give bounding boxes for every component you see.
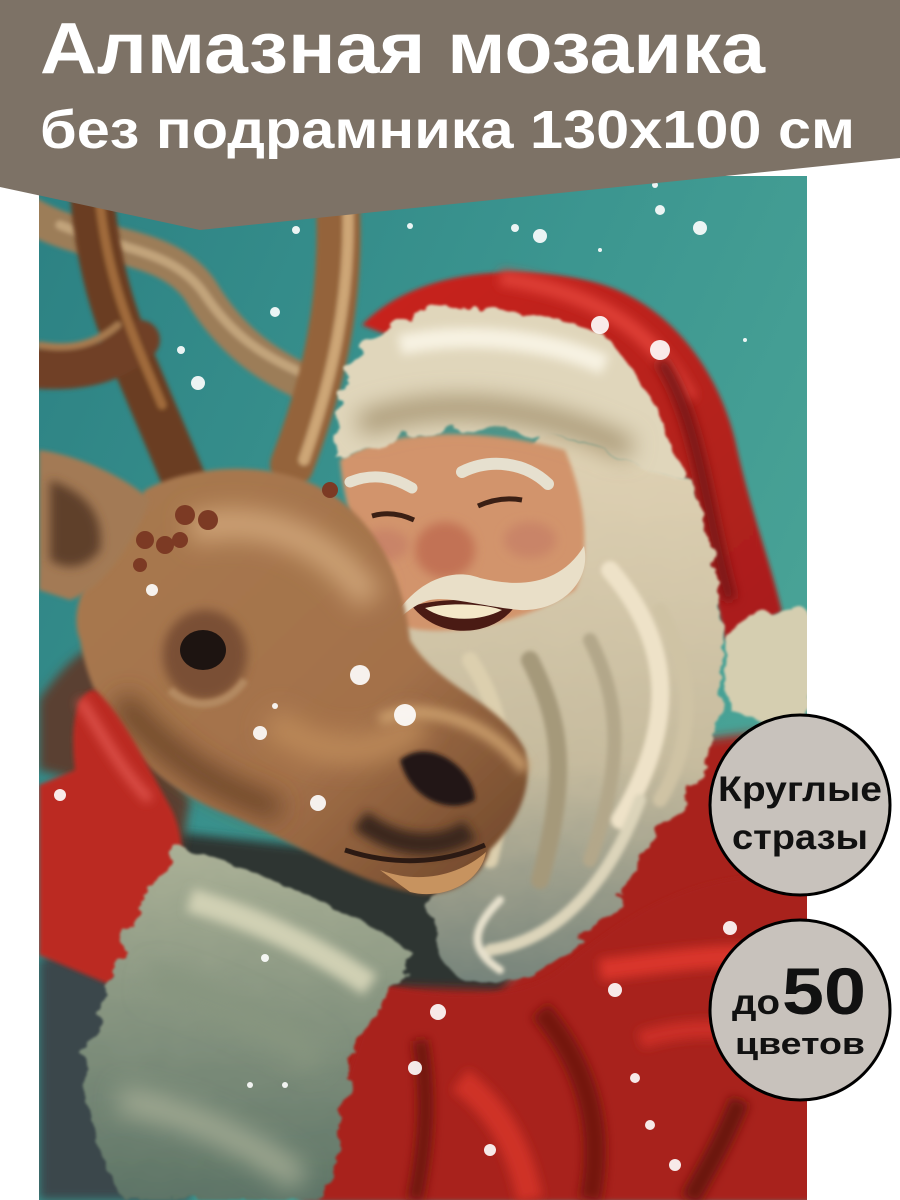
badge: round rhinestones: Круглые bbox=[718, 770, 882, 809]
deer mouth bbox=[360, 820, 470, 844]
dark lower-left background bbox=[39, 956, 194, 1200]
badge: up to 50 colours: цветов bbox=[735, 1026, 865, 1061]
antler base berries bbox=[133, 482, 338, 572]
back antler bbox=[30, 215, 310, 385]
title: Алмазная мозаика bbox=[40, 9, 766, 89]
deer fur highlight bbox=[190, 524, 370, 600]
subtitle: без подрамника 130х100 см bbox=[40, 100, 855, 160]
deer nose bbox=[400, 751, 475, 806]
header banner bbox=[0, 0, 900, 230]
red mitten bbox=[39, 690, 182, 985]
mouth bbox=[412, 600, 515, 631]
deer ear bbox=[39, 450, 150, 600]
right antler bbox=[292, 205, 348, 465]
shoulder fur bbox=[725, 610, 815, 735]
eyebrows bbox=[350, 477, 412, 488]
beard strands bbox=[470, 570, 686, 970]
red sleeve bbox=[320, 940, 807, 1200]
badge: up to 50 colours: до bbox=[732, 983, 780, 1022]
hat fur brim bbox=[337, 309, 684, 480]
Santa face bbox=[340, 434, 585, 631]
eyes bbox=[372, 514, 414, 520]
badge: round rhinestones bbox=[710, 715, 890, 895]
badge: round rhinestones: стразы bbox=[732, 818, 868, 857]
badge: up to 50 colours bbox=[710, 920, 890, 1100]
moustache bbox=[402, 546, 586, 614]
deer neck bbox=[39, 650, 190, 860]
fur cuff bbox=[84, 850, 410, 1200]
deer eye bbox=[163, 610, 247, 700]
dark backdrop behind arms bbox=[180, 827, 512, 994]
front left antler bbox=[30, 195, 192, 500]
badge: up to 50 colours: 50 bbox=[782, 954, 866, 1028]
beard bbox=[395, 430, 723, 985]
Santa hat bbox=[362, 272, 782, 640]
painting: Santa hugging a reindeer bbox=[30, 176, 815, 1200]
reindeer head bbox=[39, 450, 528, 894]
body red mass bbox=[300, 725, 815, 1200]
snowflakes bbox=[54, 182, 747, 1171]
